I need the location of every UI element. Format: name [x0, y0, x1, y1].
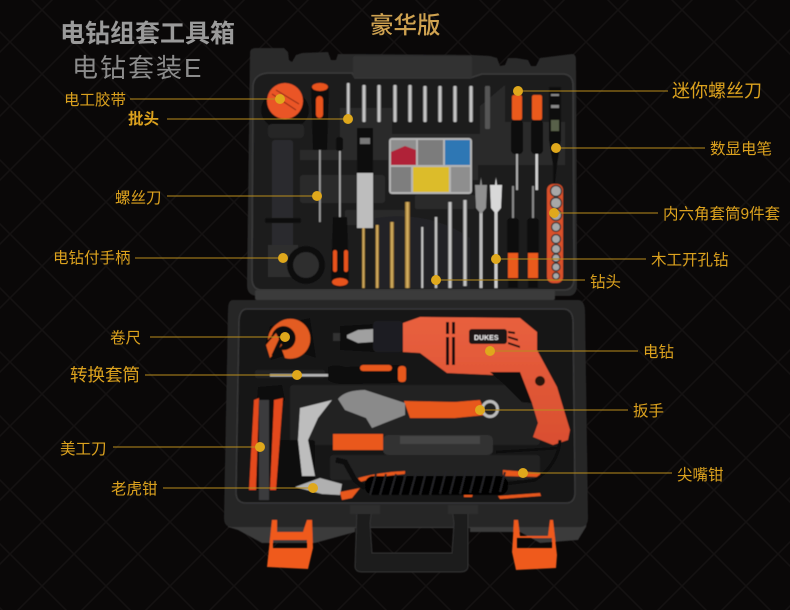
drill badge [469, 329, 507, 344]
icon: electric drill [333, 317, 570, 445]
callout: 电钻付手柄: 电钻付手柄 [53, 249, 131, 267]
callout: 美工刀 [60, 440, 265, 458]
callout: 卷尺 [110, 329, 290, 347]
icon: tape measure [265, 318, 316, 360]
lid centre bar [353, 56, 472, 78]
icon: hex socket set [547, 184, 563, 283]
callout: 扳手: 扳手 [633, 401, 664, 420]
callout: 转换套筒: 转换套筒 [70, 365, 140, 385]
callout: 美工刀: 美工刀 [60, 440, 107, 458]
icon: orange latch right [512, 520, 557, 570]
callout: 批头 [128, 110, 353, 128]
panel: upper case tray [247, 48, 577, 296]
panel: lower case tray [224, 290, 588, 572]
lock button [535, 376, 545, 386]
icon: large screwdriver upper [311, 83, 329, 222]
icon: orange latch left [267, 520, 313, 569]
icon: coiled power cord [336, 440, 560, 495]
icon: hammer [298, 400, 493, 476]
callout: 电钻付手柄 [53, 249, 288, 267]
callout: 内六角套筒9件套 [549, 205, 780, 223]
drill chuck [333, 321, 403, 352]
callout: 钻头 [431, 273, 621, 291]
upper hinge band [255, 290, 555, 300]
lower shell rim [228, 515, 588, 543]
callout: 数显电笔: 数显电笔 [710, 140, 772, 158]
icon: spade bits [475, 177, 502, 288]
callout: 老虎钳 [111, 480, 318, 498]
callout: 电工胶带 [64, 91, 285, 109]
callout: 螺丝刀: 螺丝刀 [115, 189, 162, 207]
drill body [403, 317, 570, 445]
moulded tray ribs [300, 85, 565, 288]
callout: 数显电笔 [551, 140, 772, 158]
callout: 尖嘴钳: 尖嘴钳 [677, 466, 724, 484]
icon: screwdriver bits row [346, 83, 490, 129]
lower tray recess [236, 309, 575, 503]
upper tray recess [252, 73, 574, 290]
icon: tape roll [261, 83, 309, 138]
callout: 尖嘴钳 [518, 466, 724, 484]
icon: silver drill bits [421, 200, 467, 288]
icon: combination pliers [295, 478, 360, 500]
callout: 扳手 [475, 401, 664, 420]
callout: 转换套筒 [70, 365, 302, 385]
callout: 电工胶带: 电工胶带 [64, 91, 126, 109]
callout: 木工开孔钻 [491, 251, 729, 269]
icon: mini screwdrivers upper [511, 84, 543, 190]
callout: 电钻 [485, 343, 674, 361]
callout: 迷你螺丝刀: 迷你螺丝刀 [672, 81, 762, 101]
icon: digital voltage pen [549, 87, 561, 183]
icon: utility knife [249, 385, 285, 500]
drill vents [446, 322, 520, 365]
callout: 批头: 批头 [128, 110, 159, 128]
icon: mini screwdrivers lower [507, 186, 539, 288]
icon: gold drill bits [362, 202, 410, 288]
icon: needle nose plier handles [358, 470, 541, 499]
icon: utility blade pack [357, 128, 373, 228]
icon: adjustable wrench [338, 390, 498, 428]
callout: 迷你螺丝刀 [513, 81, 762, 101]
lower shell [224, 300, 588, 527]
callout: 钻头: 钻头 [590, 273, 621, 291]
icon: case handle [350, 505, 478, 572]
trigger grip [490, 372, 532, 403]
callout: 木工开孔钻: 木工开孔钻 [651, 251, 729, 269]
callout: 螺丝刀 [115, 189, 322, 207]
title: 电钻组套工具箱 [60, 20, 235, 48]
subtitle: 电钻套装E [72, 53, 203, 83]
callout: 电钻: 电钻 [643, 343, 674, 361]
callout: 老虎钳: 老虎钳 [111, 480, 158, 498]
icon: plastic terminal box [389, 138, 472, 194]
drill badge: DUKES [474, 335, 499, 342]
edition heading: 豪华版 [370, 12, 440, 38]
callout: 卷尺: 卷尺 [110, 329, 141, 347]
moulded ribs lower [255, 370, 540, 490]
icon: flat screwdriver [331, 137, 349, 287]
upper case shell [247, 48, 577, 296]
icon: drill side handle [265, 140, 325, 284]
callout: 内六角套筒9件套: 内六角套筒9件套 [663, 205, 780, 223]
icon: conversion screwdriver [270, 365, 406, 384]
